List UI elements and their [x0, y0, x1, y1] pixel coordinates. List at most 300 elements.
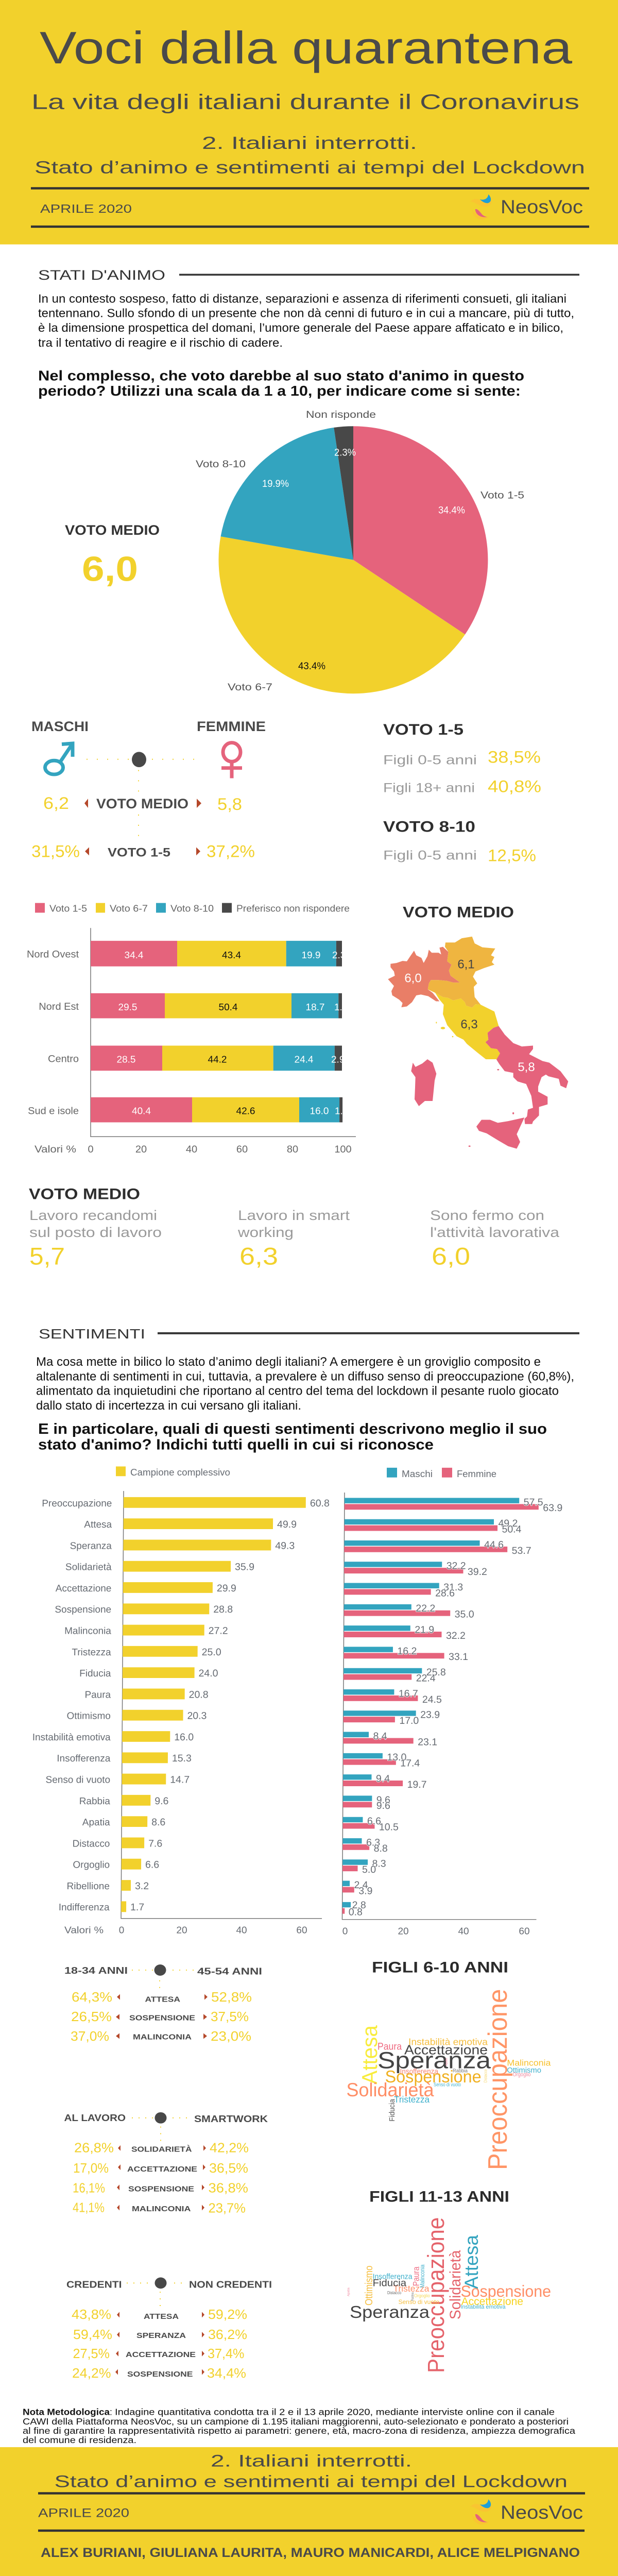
axis labels: 40: [186, 1144, 197, 1155]
maschi value labels: 6.3: [366, 1837, 380, 1848]
word cloud: figli 6-10: Insofferenza: [400, 2067, 438, 2075]
word cloud: figli 11-13: Preoccupazione: [423, 2217, 449, 2373]
word cloud: figli 6-10: Accettazione: [404, 2043, 488, 2058]
row: attesa: 52,8%: [211, 1990, 252, 2005]
subtitle: La vita degli italiani durante il Coronavirus: [31, 90, 579, 113]
word cloud: figli 6-10: Senso di vuoto: [434, 2082, 461, 2088]
value labels: 1.7: [130, 1902, 144, 1913]
row: sospensione: [73, 2181, 248, 2196]
row: accettazione: 36,5%: [209, 2161, 248, 2176]
maschi value labels: 32.2: [447, 1561, 466, 1572]
row: accettazione: ACCETTAZIONE: [127, 2165, 197, 2174]
word cloud: figli 11-13: [347, 2217, 551, 2373]
sentimenti text block: alimentato da inquietudini che riportano al centro del tema del lockdown il pesante ruolo giocato: [36, 1384, 559, 1398]
row: sospensione: 34,4%: [207, 2366, 246, 2381]
value labels: 60.8: [310, 1498, 330, 1509]
column: smart working: [237, 1208, 350, 1270]
logo wordmark: NeosVoc: [501, 196, 583, 217]
panel: maschi femmine comparison: MASCHI: [31, 719, 89, 734]
column: posto di lavoro: 5,7: [29, 1243, 65, 1270]
axis labels: maschi femmine: 20: [398, 1926, 409, 1937]
maschi value labels: 44.6: [484, 1539, 504, 1550]
femmine value labels: 0.8: [349, 1907, 363, 1918]
panel: eta comparison: 18-34 ANNI: [64, 1965, 128, 1976]
question heading 2: stato d'animo? Indichi tutti quelli in cui si riconosce: [38, 1437, 434, 1453]
value labels: 9.6: [154, 1795, 168, 1807]
row: Nord Ovest: 19.9: [302, 950, 320, 961]
pie chart: 19.9%: [262, 478, 289, 489]
panel: eta comparison: 45-54 ANNI: [197, 1966, 262, 1977]
row: speranza: 59,4%: [73, 2328, 112, 2342]
maschi value labels: 22.2: [416, 1603, 435, 1614]
panel: eta comparison: [64, 1964, 262, 2044]
sentimenti text block: altalenante di sentimenti in cui, tuttavia, a prevalere è un diffuso senso di preoccupazione (60,8%),: [36, 1370, 574, 1384]
word cloud: figli 6-10: [346, 1989, 551, 2170]
heading: voto medio map: VOTO MEDIO: [403, 904, 514, 921]
row: malinconia: [73, 2200, 246, 2215]
axis labels: 100: [334, 1144, 352, 1155]
axis labels: maschi femmine: 0: [342, 1926, 348, 1937]
category labels: Fiducia: [79, 1668, 111, 1679]
femmine value labels: 28.6: [435, 1587, 455, 1599]
word cloud: figli 6-10: Distacco: [483, 2069, 488, 2082]
pie chart: Non risponde: [306, 409, 376, 420]
value labels: 27.2: [209, 1625, 228, 1636]
column: posto di lavoro: sul posto di lavoro: [29, 1225, 162, 1240]
word cloud: figli 11-13: Ottimismo: [364, 2266, 375, 2306]
word cloud: figli 6-10: Solidarietà: [346, 2079, 434, 2100]
category labels: Nord Ovest: [27, 948, 79, 960]
panel: credenti comparison: [66, 2277, 272, 2381]
icon: female symbol: [221, 743, 242, 778]
sentimenti text block: [36, 1355, 574, 1413]
pie chart: 34.4%: [438, 504, 465, 516]
category labels: Sospensione: [55, 1604, 111, 1615]
value labels: 6.6: [145, 1859, 159, 1871]
pie chart: [196, 409, 524, 693]
row: sospensione: [72, 2366, 246, 2381]
maschi value labels: 8.3: [372, 1858, 386, 1870]
axis labels: campione: 60: [296, 1925, 307, 1936]
question heading: Nel complesso, che voto darebbe al suo stato d'animo in questo: [38, 367, 524, 383]
maschi value labels: 21.9: [415, 1624, 434, 1635]
word cloud: figli 11-13: Rabbia: [411, 2292, 415, 2301]
row: solidarieta: 42,2%: [210, 2141, 249, 2155]
femmine value labels: 23.1: [418, 1736, 437, 1748]
row: solidarieta: SOLIDARIETÀ: [131, 2145, 192, 2154]
category labels: Nord Est: [39, 1001, 79, 1012]
footer heading line 1: 2. Italiani interrotti.: [211, 2451, 412, 2470]
icon: male symbol: [45, 743, 73, 774]
bars: [121, 1497, 306, 1912]
column: fermo: [430, 1208, 559, 1270]
maschi value labels: 2.8: [352, 1900, 366, 1911]
row: malinconia: 23,7%: [209, 2201, 246, 2215]
row: Nord Ovest: 2.3: [332, 950, 346, 961]
word cloud: figli 6-10: Tristezza: [394, 2094, 430, 2105]
word cloud: figli 11-13: Fiducia: [373, 2277, 407, 2289]
pie chart: Voto 1-5: [480, 490, 524, 501]
voto medio row: [43, 793, 242, 814]
maschi value labels: 16.7: [399, 1688, 418, 1699]
voto medio row: VOTO MEDIO: [96, 796, 188, 811]
row: accettazione: 37,4%: [208, 2347, 245, 2361]
axis labels: campione: 0: [119, 1925, 124, 1936]
word cloud: figli 6-10: Malinconia: [507, 2058, 551, 2068]
maschi value labels: 49.2: [498, 1518, 518, 1529]
value labels: 25.0: [202, 1647, 221, 1658]
legend: maschi femmine: Maschi: [402, 1469, 433, 1480]
callout: voto medio: 6,0: [82, 550, 138, 588]
category labels: Insofferenza: [57, 1753, 111, 1764]
panel: figli values: Figli 0-5 anni: [383, 848, 477, 862]
voto 1-5 row: 37,2%: [207, 841, 255, 860]
row: malinconia: 37,0%: [71, 2029, 109, 2044]
panel: credenti comparison: NON CREDENTI: [189, 2279, 272, 2290]
title: Voci dalla quarantena: [40, 22, 573, 73]
category labels: Accettazione: [56, 1583, 111, 1594]
category labels: Solidarietà: [65, 1562, 112, 1573]
category labels: Distacco: [73, 1838, 110, 1849]
column: smart working: Lavoro in smart: [238, 1208, 350, 1223]
map of Italy: 6,3: [460, 1018, 478, 1031]
row: malinconia: 23,0%: [211, 2029, 251, 2044]
column: posto di lavoro: [29, 1208, 162, 1270]
methodological note: :: [110, 2406, 112, 2417]
row: sospensione: 26,5%: [71, 2010, 112, 2024]
value labels: 3.2: [135, 1880, 149, 1892]
maschi value labels: 16.2: [397, 1646, 417, 1657]
row: solidarieta: [74, 2141, 249, 2155]
bar chart: campione complessivo: [31, 1491, 330, 1919]
row: sospensione: 16,1%: [73, 2181, 105, 2196]
maschi value labels: 8.4: [373, 1731, 387, 1742]
row: Nord Est: 18.7: [306, 1002, 324, 1013]
header panel: [0, 0, 618, 244]
word cloud: figli 6-10: Instabilità emotiva: [408, 2037, 488, 2047]
column: fermo: Sono fermo con: [430, 1208, 544, 1223]
panel: credenti comparison: CREDENTI: [66, 2279, 122, 2290]
column: fermo: l'attività lavorativa: [430, 1225, 559, 1240]
word cloud: figli 11-13: Orgoglio: [414, 2293, 430, 2299]
pie chart: 2.3%: [334, 447, 356, 458]
femmine bars: [342, 1504, 539, 1914]
maschi value labels: 9.4: [376, 1773, 390, 1784]
value labels: 14.7: [170, 1774, 190, 1785]
row: attesa: ATTESA: [145, 1995, 180, 2004]
section heading: sentimenti: [39, 1327, 579, 1342]
row: Nord Ovest: 43.4: [222, 950, 241, 961]
intro text block: [38, 292, 574, 349]
legend: maschi femmine: Femmine: [457, 1469, 496, 1480]
pie chart: Voto 6-7: [228, 682, 272, 693]
row: accettazione: 17,0%: [73, 2161, 109, 2176]
maschi value labels: 13.0: [387, 1752, 407, 1763]
category labels: Indifferenza: [59, 1902, 110, 1913]
word cloud: figli 11-13: Paura: [411, 2266, 421, 2286]
femmine value labels: 32.2: [446, 1630, 466, 1641]
category labels: Paura: [84, 1689, 111, 1700]
row: attesa: 64,3%: [72, 1990, 112, 2005]
axis labels: campione: 40: [236, 1925, 247, 1936]
category labels: Apatia: [82, 1817, 110, 1828]
date: APRILE 2020: [40, 202, 132, 215]
methodological note: del comune di residenza.: [23, 2435, 136, 2445]
row: Sud e isole: [91, 1097, 348, 1122]
femmine value labels: 17.4: [400, 1758, 420, 1769]
maschi value labels: 9.6: [376, 1794, 390, 1806]
legend: stacked bars: Voto 1-5: [49, 904, 87, 914]
row: Centro: 44.2: [208, 1054, 227, 1065]
word cloud: figli 11-13: Solidarietà: [447, 2250, 464, 2319]
maschi value labels: [352, 1497, 543, 1911]
map of Italy: 6,1: [457, 958, 475, 972]
row: Nord Est: 50.4: [219, 1002, 237, 1013]
column: posto di lavoro: Lavoro recandomi: [29, 1208, 157, 1223]
femmine value labels: 10.5: [379, 1822, 399, 1833]
callout: voto medio: [65, 522, 160, 588]
legend: campione complessivo: Campione complessivo: [130, 1467, 230, 1478]
callout: voto medio: VOTO MEDIO: [65, 522, 160, 538]
value labels: 16.0: [174, 1732, 194, 1743]
value labels: 15.3: [172, 1753, 192, 1764]
row: attesa: [72, 1990, 252, 2005]
footer panel: [0, 2447, 618, 2576]
category labels: Instabilità emotiva: [32, 1732, 111, 1743]
word cloud: figli 6-10: Rabbia: [453, 2068, 468, 2074]
value labels: 49.3: [275, 1540, 295, 1551]
maschi value labels: 31.3: [443, 1582, 463, 1593]
pie chart: Voto 8-10: [196, 459, 246, 470]
word cloud: figli 6-10: Attesa: [357, 2025, 382, 2084]
question heading: periodo? Utilizzi una scala da 1 a 10, per indicare come si sente:: [38, 383, 521, 399]
row: speranza: SPERANZA: [136, 2331, 186, 2340]
sentimenti text block: Ma cosa mette in bilico lo stato d’animo degli italiani? A emergere è un groviglio composito e: [36, 1355, 541, 1369]
row: attesa: ATTESA: [144, 2312, 179, 2321]
row: attesa: 59,2%: [208, 2308, 247, 2322]
legend: stacked bars: Voto 6-7: [110, 904, 148, 914]
row: accettazione: [73, 2161, 248, 2176]
femmine value labels: 8.8: [374, 1843, 388, 1854]
word cloud: figli 11-13: Distacco: [387, 2291, 402, 2295]
row: speranza: 36,2%: [208, 2328, 247, 2342]
row: Sud e isole: 42.6: [236, 1106, 255, 1117]
panel: lavoro comparison: AL LAVORO: [64, 2113, 126, 2124]
word cloud: figli 6-10: Preoccupazione: [483, 1989, 512, 2170]
panel: figli values: VOTO 8-10: [383, 819, 475, 836]
femmine value labels: [349, 1502, 562, 1918]
bar chart: maschi femmine: [342, 1493, 562, 1920]
category labels: [31, 1498, 112, 1913]
word cloud: figli 11-13: Attesa: [461, 2235, 482, 2289]
category labels: Ottimismo: [66, 1711, 111, 1722]
methodological note: Indagine quantitativa condotta tra il 2 e il 13 aprile 2020, mediante interviste online con il canale: [115, 2406, 555, 2417]
axis labels: campione: Valori %: [64, 1925, 104, 1936]
row: Sud e isole: 16.0: [310, 1106, 329, 1117]
word cloud: figli 11-13: Sospensione: [461, 2282, 551, 2300]
axis labels: maschi femmine: 60: [519, 1926, 530, 1937]
axis labels: [35, 1144, 352, 1155]
femmine value labels: 39.2: [468, 1566, 487, 1578]
footer wordmark: NeosVoc: [501, 2502, 583, 2523]
row: Nord Est: 1.4: [334, 1002, 348, 1013]
word cloud: figli 11-13: Senso di vuoto: [399, 2298, 439, 2306]
row: sospensione: 37,5%: [211, 2010, 249, 2024]
row: sospensione: 36,8%: [209, 2181, 248, 2196]
femmine value labels: 35.0: [455, 1609, 474, 1620]
axis labels: maschi femmine: [342, 1926, 530, 1937]
intro text block: tra il tentativo di reagire e il rischio di cadere.: [38, 336, 283, 349]
methodological note: CAWI della Piattaforma NeosVoc, su un campione di 1.195 italiani maggiorenni, auto-selezionato e ponderato a posteriori: [23, 2416, 569, 2427]
voto medio row: 6,2: [43, 793, 69, 812]
legend: stacked bars: Voto 8-10: [170, 904, 214, 914]
panel: lavoro comparison: SMARTWORK: [194, 2114, 268, 2125]
legend: maschi femmine: [387, 1468, 496, 1480]
femmine value labels: 53.7: [512, 1545, 531, 1556]
femmine value labels: 3.9: [358, 1885, 372, 1896]
axis labels: Valori %: [35, 1144, 76, 1155]
femmine value labels: 50.4: [502, 1524, 522, 1535]
word cloud: figli 11-13: Insofferenza: [373, 2273, 413, 2281]
axis labels: maschi femmine: 40: [458, 1926, 469, 1937]
methodological note: Nota Metodologica: [23, 2406, 110, 2417]
row: Sud e isole: 1.0: [335, 1106, 348, 1117]
question heading 2: E in particolare, quali di questi sentimenti descrivono meglio il suo: [38, 1421, 547, 1437]
value labels: 20.8: [189, 1689, 209, 1700]
footer heading line 2: Stato d’animo e sentimenti ai tempi del Lockdown: [55, 2471, 568, 2490]
intro text block: è la dimensione prospettica del domani, l’umore generale del Paese appare affaticato e in bilico,: [38, 321, 563, 334]
question heading: [38, 367, 524, 399]
footer date: APRILE 2020: [38, 2506, 129, 2520]
issue heading line 1: 2. Italiani interrotti.: [202, 133, 417, 153]
maschi value labels: 57.5: [524, 1497, 543, 1508]
issue heading line 2: Stato d’animo e sentimenti ai tempi del Lockdown: [35, 158, 585, 177]
femmine value labels: 17.0: [399, 1715, 419, 1726]
methodological note: al fine di garantire la rappresentatività rispetto ai parametri: genere, età, macro-zona di residenza, ampiezza demografica: [23, 2426, 575, 2436]
map of Italy: 5,8: [518, 1060, 535, 1074]
word cloud: figli 6-10: Paura: [377, 2041, 402, 2052]
column: smart working: working: [237, 1225, 294, 1240]
panel: figli values: 12,5%: [488, 845, 536, 865]
voto 1-5 row: 31,5%: [31, 841, 80, 860]
value labels: 8.6: [151, 1817, 165, 1828]
pie chart: 43.4%: [298, 660, 325, 672]
category labels: Preoccupazione: [42, 1498, 112, 1509]
row: sospensione: SOSPENSIONE: [128, 2185, 194, 2194]
maschi value labels: 25.8: [426, 1667, 446, 1678]
femmine value labels: 9.6: [376, 1800, 390, 1811]
category labels: Attesa: [84, 1519, 112, 1530]
word cloud: figli 11-13: Accettazione: [461, 2296, 523, 2308]
sentimenti text block: dallo stato di incertezza in cui versano gli italiani.: [36, 1399, 301, 1413]
word cloud: figli 11-13: Tristezza: [393, 2283, 430, 2294]
axis labels: 20: [135, 1144, 147, 1155]
maschi value labels: 2.4: [354, 1879, 368, 1891]
row: speranza: [73, 2328, 247, 2342]
value labels: 24.0: [199, 1668, 218, 1679]
axis labels: campione: [64, 1925, 307, 1936]
maschi value labels: 23.9: [420, 1709, 440, 1721]
value labels: 28.8: [213, 1604, 233, 1615]
femmine value labels: 24.5: [422, 1694, 442, 1705]
word cloud: figli 6-10: Sospensione: [385, 2067, 482, 2087]
word cloud: figli 6-10: Ottimismo: [507, 2066, 541, 2075]
word cloud: figli 11-13: Instabilità emotiva: [461, 2304, 506, 2310]
methodological note: [23, 2406, 575, 2445]
row: Nord Ovest: [91, 941, 346, 967]
panel: lavoro comparison: [64, 2112, 268, 2215]
row: accettazione: ACCETTAZIONE: [126, 2350, 196, 2359]
row: attesa: [72, 2308, 247, 2322]
heading: figli 6-10: FIGLI 6-10 ANNI: [372, 1959, 508, 1976]
icon: footer logo: [470, 2499, 492, 2524]
category labels: Centro: [48, 1053, 79, 1064]
row: accettazione: 27,5%: [73, 2347, 110, 2361]
word cloud: figli 11-13: Apatia: [347, 2287, 351, 2296]
row: malinconia: 41,1%: [73, 2200, 105, 2215]
value labels: [130, 1498, 330, 1913]
row: Nord Ovest: 34.4: [125, 950, 143, 961]
femmine value labels: 63.9: [543, 1502, 562, 1514]
panel: figli values: 38,5%: [488, 748, 541, 767]
row: Nord Est: [91, 993, 348, 1018]
bar chart: voto per area: [27, 928, 356, 1155]
panel: figli values: 40,8%: [488, 776, 541, 795]
femmine value labels: 19.7: [407, 1779, 427, 1790]
panel: figli values: Figli 0-5 anni: [383, 753, 477, 768]
panel: figli values: Figli 18+ anni: [383, 781, 475, 795]
map of Italy: 6,0: [404, 972, 422, 985]
axis labels: campione: 20: [176, 1925, 187, 1936]
row: Centro: 28.5: [117, 1054, 135, 1065]
row: Centro: 2.9: [331, 1054, 345, 1065]
row: Sud e isole: 40.4: [132, 1106, 151, 1117]
voto 1-5 row: VOTO 1-5: [108, 845, 170, 859]
maschi bars: [342, 1498, 519, 1907]
category labels: Orgoglio: [73, 1860, 110, 1871]
row: Centro: 24.4: [295, 1054, 313, 1065]
row: attesa: 43,8%: [72, 2308, 111, 2322]
femmine value labels: 5.0: [362, 1864, 376, 1875]
femmine value labels: 33.1: [449, 1651, 468, 1663]
row: sospensione: [71, 2010, 249, 2024]
row: sospensione: SOSPENSIONE: [127, 2370, 193, 2379]
legend: stacked bars: Preferisco non rispondere: [236, 904, 350, 914]
row: sospensione: 24,2%: [72, 2366, 111, 2381]
voto medio row: 5,8: [217, 794, 242, 814]
value labels: 35.9: [235, 1562, 254, 1573]
panel: maschi femmine comparison: [31, 719, 266, 860]
category labels: Senso di vuoto: [46, 1775, 110, 1785]
category labels: Tristezza: [72, 1647, 111, 1658]
axis labels: 80: [287, 1144, 298, 1155]
row: malinconia: MALINCONIA: [132, 2205, 191, 2213]
value labels: 7.6: [148, 1838, 162, 1849]
dotted connectors: [87, 759, 195, 842]
row: solidarieta: 26,8%: [74, 2141, 114, 2155]
word cloud: figli 6-10: Apatia: [445, 2058, 449, 2066]
panel: figli values: [383, 721, 541, 865]
axis labels: 0: [88, 1144, 94, 1155]
panel: voto medio per lavoro: [29, 1185, 559, 1270]
row: Centro: [91, 1046, 345, 1071]
value labels: 49.9: [277, 1519, 297, 1530]
category labels: [27, 948, 79, 1117]
category labels: Speranza: [70, 1540, 112, 1551]
value labels: 29.9: [217, 1583, 236, 1594]
category labels: Rabbia: [79, 1796, 110, 1807]
authors: ALEX BURIANI, GIULIANA LAURITA, MAURO MANICARDI, ALICE MELPIGNANO: [41, 2546, 580, 2560]
